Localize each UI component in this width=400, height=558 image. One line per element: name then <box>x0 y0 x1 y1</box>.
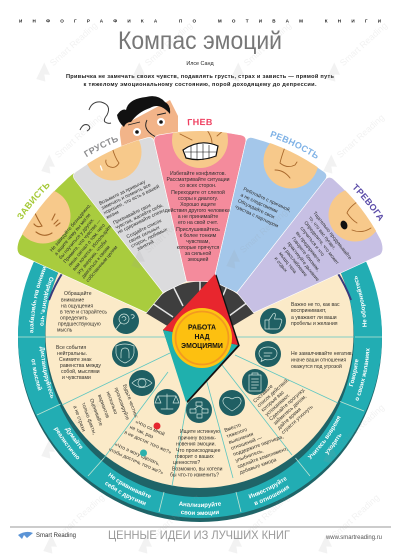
text: anxiety advice: случиться и что <box>299 226 325 258</box>
watermarks: Smart Reading <box>335 112 386 160</box>
outer ring labels: себя с другими <box>105 482 146 506</box>
tip: self respect: а уважают ли ваши <box>291 315 337 321</box>
tip: true cause: ценностях? <box>173 460 200 466</box>
logo icon <box>18 532 33 539</box>
icon: heart <box>219 390 245 416</box>
text: anger advice: к более тонким <box>180 233 217 239</box>
watermarks: Smart Reading <box>150 492 201 540</box>
tip: relationships: тяжелого <box>226 427 248 440</box>
tip: action list: список действий, <box>256 377 291 409</box>
text: jealousy advice: Обсуждайте свои <box>237 197 276 221</box>
tip: action list: страсти утихнуть <box>280 404 315 436</box>
outer ring labels: Говорите <box>348 359 358 386</box>
text: jealousy advice: Работайте с причиной, <box>242 185 292 214</box>
tip: neutral events: и чувствами <box>62 375 91 381</box>
text: anxiety advice: практикуйте дыхание <box>286 240 321 283</box>
icon: linked boxes <box>186 397 212 423</box>
text: anger advice: ссоры к диалогу. <box>178 196 218 202</box>
tip: realistic thinking: Будьте честны: <box>121 384 139 419</box>
text: envy advice: эту энергию, чтобы <box>76 238 109 276</box>
tip: action list: займитесь делом, <box>272 393 308 427</box>
outer ring labels: Анализируйте <box>178 502 221 508</box>
intro text: Привычка не замечать своих чувств, подавлять грусть, страх и зависть — прямой путь <box>66 73 335 80</box>
watermarks: Smart Reading <box>48 20 99 68</box>
footer slogan: ЦЕННЫЕ ИДЕИ ИЗ ЛУЧШИХ КНИГ <box>108 528 290 542</box>
text: anger advice: действия другого человека, <box>165 207 231 214</box>
text: anger advice: за сильной <box>185 250 211 257</box>
tip: questions: я не достиг того же?» <box>123 430 172 456</box>
hub: work on emotions: ЭМОЦИЯМИ <box>181 343 223 350</box>
watermarks: Smart Reading <box>238 207 289 255</box>
tip: questions: не так, раз <box>129 425 155 441</box>
tip: body sensations: в теле и старайтесь <box>60 308 107 316</box>
tip: true cause: причину возник- <box>178 436 216 442</box>
text: anxiety advice: то, что вас пугает. <box>307 216 336 251</box>
tip: self respect: воспринимают, <box>291 308 326 314</box>
header: infographic caption: ИНФОГРАФИКА ПО МОТИВАМ КНИГИ <box>19 18 381 24</box>
tip: neutral events: равенства между <box>60 363 101 369</box>
tip: realistic thinking: несколько <box>105 391 118 415</box>
tip: negative: Не замалчивайте негатив, <box>291 350 353 357</box>
heading: jealousy: РЕВНОСТЬ <box>270 130 318 158</box>
tip: self respect: пробелы и желания <box>291 321 338 327</box>
icon: scales <box>154 389 180 415</box>
text: envy advice: лишь сигнал о том, чего <box>68 223 107 268</box>
tip: neutral events: Все события <box>56 345 86 351</box>
heading: envy: ЗАВИСТЬ <box>17 184 50 220</box>
outer ring labels: Не обороняйтесь <box>354 276 367 327</box>
panel: sadness wedge <box>73 124 186 293</box>
text: envy advice: собственным целям <box>85 244 119 284</box>
tip: relationships: выяснения <box>228 431 254 446</box>
tip: true cause: Что происходящее <box>176 448 221 454</box>
outer ring labels: реалистично <box>54 427 80 460</box>
text: anger advice: Переходите от слепой <box>171 189 225 196</box>
tip: neutral events: нейтральны. <box>57 350 87 357</box>
text: sadness advice: замечать и помнить все <box>101 183 152 211</box>
watermarks: Smart Reading <box>53 112 104 160</box>
tip: action list: дайте время <box>276 406 303 431</box>
tip: realistic thinking: прогнозируйте <box>113 386 131 421</box>
tip: realistic thinking: Оценивайте <box>88 397 104 427</box>
tip: body sensations: Обращайте <box>64 290 92 297</box>
tip: questions: чтобы достичь того же?» <box>108 447 164 476</box>
text: jealousy advice: чувства с партнером <box>234 205 279 230</box>
text: anxiety advice: вы предпримете. <box>294 231 322 265</box>
tip: true cause: новения эмоции. <box>176 442 216 448</box>
hub: work on emotions: НАД <box>194 334 210 341</box>
hub: work on emotions: РАБОТА <box>188 324 216 332</box>
compass needle <box>163 274 240 403</box>
tip: body sensations: внимание <box>61 298 84 304</box>
decorative head peeking <box>117 96 178 150</box>
tip: true cause: Ищите истинную <box>180 429 220 435</box>
outer ring labels: в отношения <box>254 486 290 506</box>
outer ring labels: Думайте <box>64 428 82 449</box>
watermarks: Smart Reading <box>335 402 386 450</box>
text: anxiety advice: и отдых <box>273 257 288 274</box>
text: sadness advice: чувства, жалейте себя, <box>114 202 164 231</box>
text: anger advice: чувствам, <box>186 239 210 245</box>
text: anxiety advice: Определите, что может <box>302 220 340 266</box>
text: anger advice: эмоцией <box>188 256 208 263</box>
text: envy advice: а ищите чему вы могли <box>54 213 92 257</box>
tip: action list: Сделайте прогулку, <box>268 386 307 422</box>
watermarks: Smart Reading <box>242 20 293 68</box>
tip: self respect: Важно не то, как вас <box>291 302 340 308</box>
text: sadness advice: своих сильных <box>128 225 161 245</box>
author: Илсе Санд <box>186 61 214 67</box>
tip: neutral events: собой, мыслями <box>61 368 100 375</box>
text: envy advice: бы поучиться у других. <box>58 217 96 261</box>
tip: true cause: Возможно, вы хотели <box>172 466 223 472</box>
tip: questions: «Что я могу сделать, <box>113 442 161 467</box>
logo text: Smart Reading <box>36 532 76 539</box>
text: envy advice: вам хочется. Используйте <box>71 222 114 272</box>
website: www.smartreading.ru <box>325 534 383 541</box>
hub: work on emotions <box>172 308 232 368</box>
tip: neutral events: Снимите знак <box>59 357 92 363</box>
outer ring labels: Определите, что <box>40 277 54 326</box>
icon: eye <box>129 370 155 396</box>
icon: clipboard <box>242 369 268 395</box>
text: sadness advice: Возьмите за привычку <box>98 179 147 207</box>
heading: sadness: ГРУСТЬ <box>84 137 118 157</box>
tip: body sensations: определить <box>60 316 88 322</box>
icon: speech bubble <box>255 341 281 367</box>
heading: anxiety: ТРЕВОГА <box>353 183 384 222</box>
text: sadness advice: не сдерживайте слезы <box>116 207 166 236</box>
text: envy advice: Не завидуйте безнадежно, <box>48 202 93 253</box>
watermarks: Smart Reading <box>330 492 381 540</box>
tip: realistic thinking: а не страхи <box>71 405 86 433</box>
outer ring labels: именно вы чувствуете <box>29 266 46 333</box>
tip: true cause: говорит о ваших <box>175 454 214 460</box>
text: jealousy advice: а не следствиями <box>239 193 278 215</box>
tip: true cause: бы что-то изменить? <box>170 472 219 478</box>
panel: envy wedge <box>16 170 163 313</box>
outer ring labels: Инвестируйте <box>248 477 287 498</box>
outer ring labels: свои эмоции <box>181 510 219 516</box>
tip: realistic thinking: только факты, <box>80 402 97 436</box>
tip: relationships: улыбнитесь, <box>235 448 264 464</box>
tip: body sensations: предшествующую <box>58 322 101 328</box>
wedge headings <box>17 118 384 222</box>
outer ring labels: Дистанцируйтесь <box>39 346 54 398</box>
cream segment tips <box>56 290 353 478</box>
watermarks: Smart Reading <box>143 207 194 255</box>
text: envy advice: Примите, что чувство — <box>62 218 103 265</box>
text: anger advice: Хорошо ищите <box>180 202 216 208</box>
watermarks: Smart Reading <box>338 20 389 68</box>
tip: relationships: Вместо <box>224 422 242 434</box>
text: anger advice: а не принимайте <box>178 213 218 220</box>
text: anxiety advice: Тщательно продумывайте <box>311 210 354 261</box>
tip: relationships: добавьте юмора <box>239 457 278 476</box>
text: anger advice: Рассматривайте ситуации <box>166 176 230 183</box>
title: Компас эмоций <box>118 27 282 55</box>
text: sadness advice: жизни <box>106 210 120 221</box>
text: anger advice: его на свой счет. <box>178 219 218 226</box>
tip: relationships: поддержите партнера, <box>232 434 284 458</box>
watermarks: Smart Reading <box>240 492 291 540</box>
panel: jealousy wedge <box>214 134 327 293</box>
outer ring labels: Учитесь вовремя <box>308 416 341 460</box>
intro text: к тяжелому эмоциональному состоянию, порой доходящему до депрессии. <box>84 81 317 88</box>
compass wheel <box>18 154 382 522</box>
tip: negative: иначе ваши отношения <box>291 358 346 364</box>
text: anger advice: которые прячутся <box>177 245 220 251</box>
icon: thumbs up <box>260 308 286 334</box>
panel: anger wedge <box>154 131 246 282</box>
heading: anger: ГНЕВ <box>188 118 212 126</box>
text: anger advice: Избегайте конфликтов. <box>170 170 226 177</box>
text: anxiety advice: мышц тела <box>277 252 297 275</box>
text: anxiety advice: и расслабление <box>281 246 308 278</box>
outer ring labels <box>29 266 370 516</box>
text: anger advice: Прислушивайтесь <box>176 226 220 233</box>
outer ring labels: от мыслей <box>32 359 42 390</box>
text: anger advice: со всех сторон. <box>180 183 216 189</box>
outer ring labels: уходить <box>325 434 342 456</box>
icon: shield head <box>112 341 138 367</box>
gauge sector <box>146 280 254 345</box>
tip: action list: Составьте <box>252 384 274 404</box>
tip: action list: которые вас <box>260 389 286 413</box>
footer rule <box>10 526 391 528</box>
tip: body sensations: мысль <box>57 328 73 334</box>
watermarks: Smart Reading <box>55 492 106 540</box>
text: envy advice: двигаться к своим <box>81 245 112 280</box>
icon: magnifier with question marks <box>113 308 139 334</box>
text: sadness advice: хорошее, что есть в вашей <box>102 183 161 216</box>
text: sadness advice: Признавайте свои <box>112 202 152 226</box>
outer ring labels: о своих желаниях <box>356 348 370 401</box>
panel: anxiety wedge <box>237 177 383 313</box>
text: sadness advice: занятий <box>136 238 155 252</box>
tip: body sensations: на ощущения <box>61 304 93 310</box>
icon: go sign <box>140 450 147 456</box>
tip: negative: окажутся под угрозой <box>291 363 342 370</box>
tip: questions: «Что со мной <box>134 418 166 438</box>
watermarks: Smart Reading <box>143 20 194 68</box>
tip: relationships: сделайте комплимент, <box>236 445 289 470</box>
tip: relationships: отношений — <box>230 434 264 452</box>
tip: realistic thinking: вариантов <box>96 394 110 419</box>
outer ring labels: Не сравнивайте <box>108 472 151 498</box>
question marks <box>80 102 111 131</box>
icon: stop sign <box>154 422 160 430</box>
text: anxiety advice: Говорите близким, <box>290 236 321 273</box>
text: sadness advice: сторон, любимых <box>130 227 169 250</box>
text: sadness advice: Создайте список <box>125 217 163 240</box>
tip: action list: успокаивают. <box>264 393 291 418</box>
watermarks: Smart Reading <box>53 397 104 445</box>
